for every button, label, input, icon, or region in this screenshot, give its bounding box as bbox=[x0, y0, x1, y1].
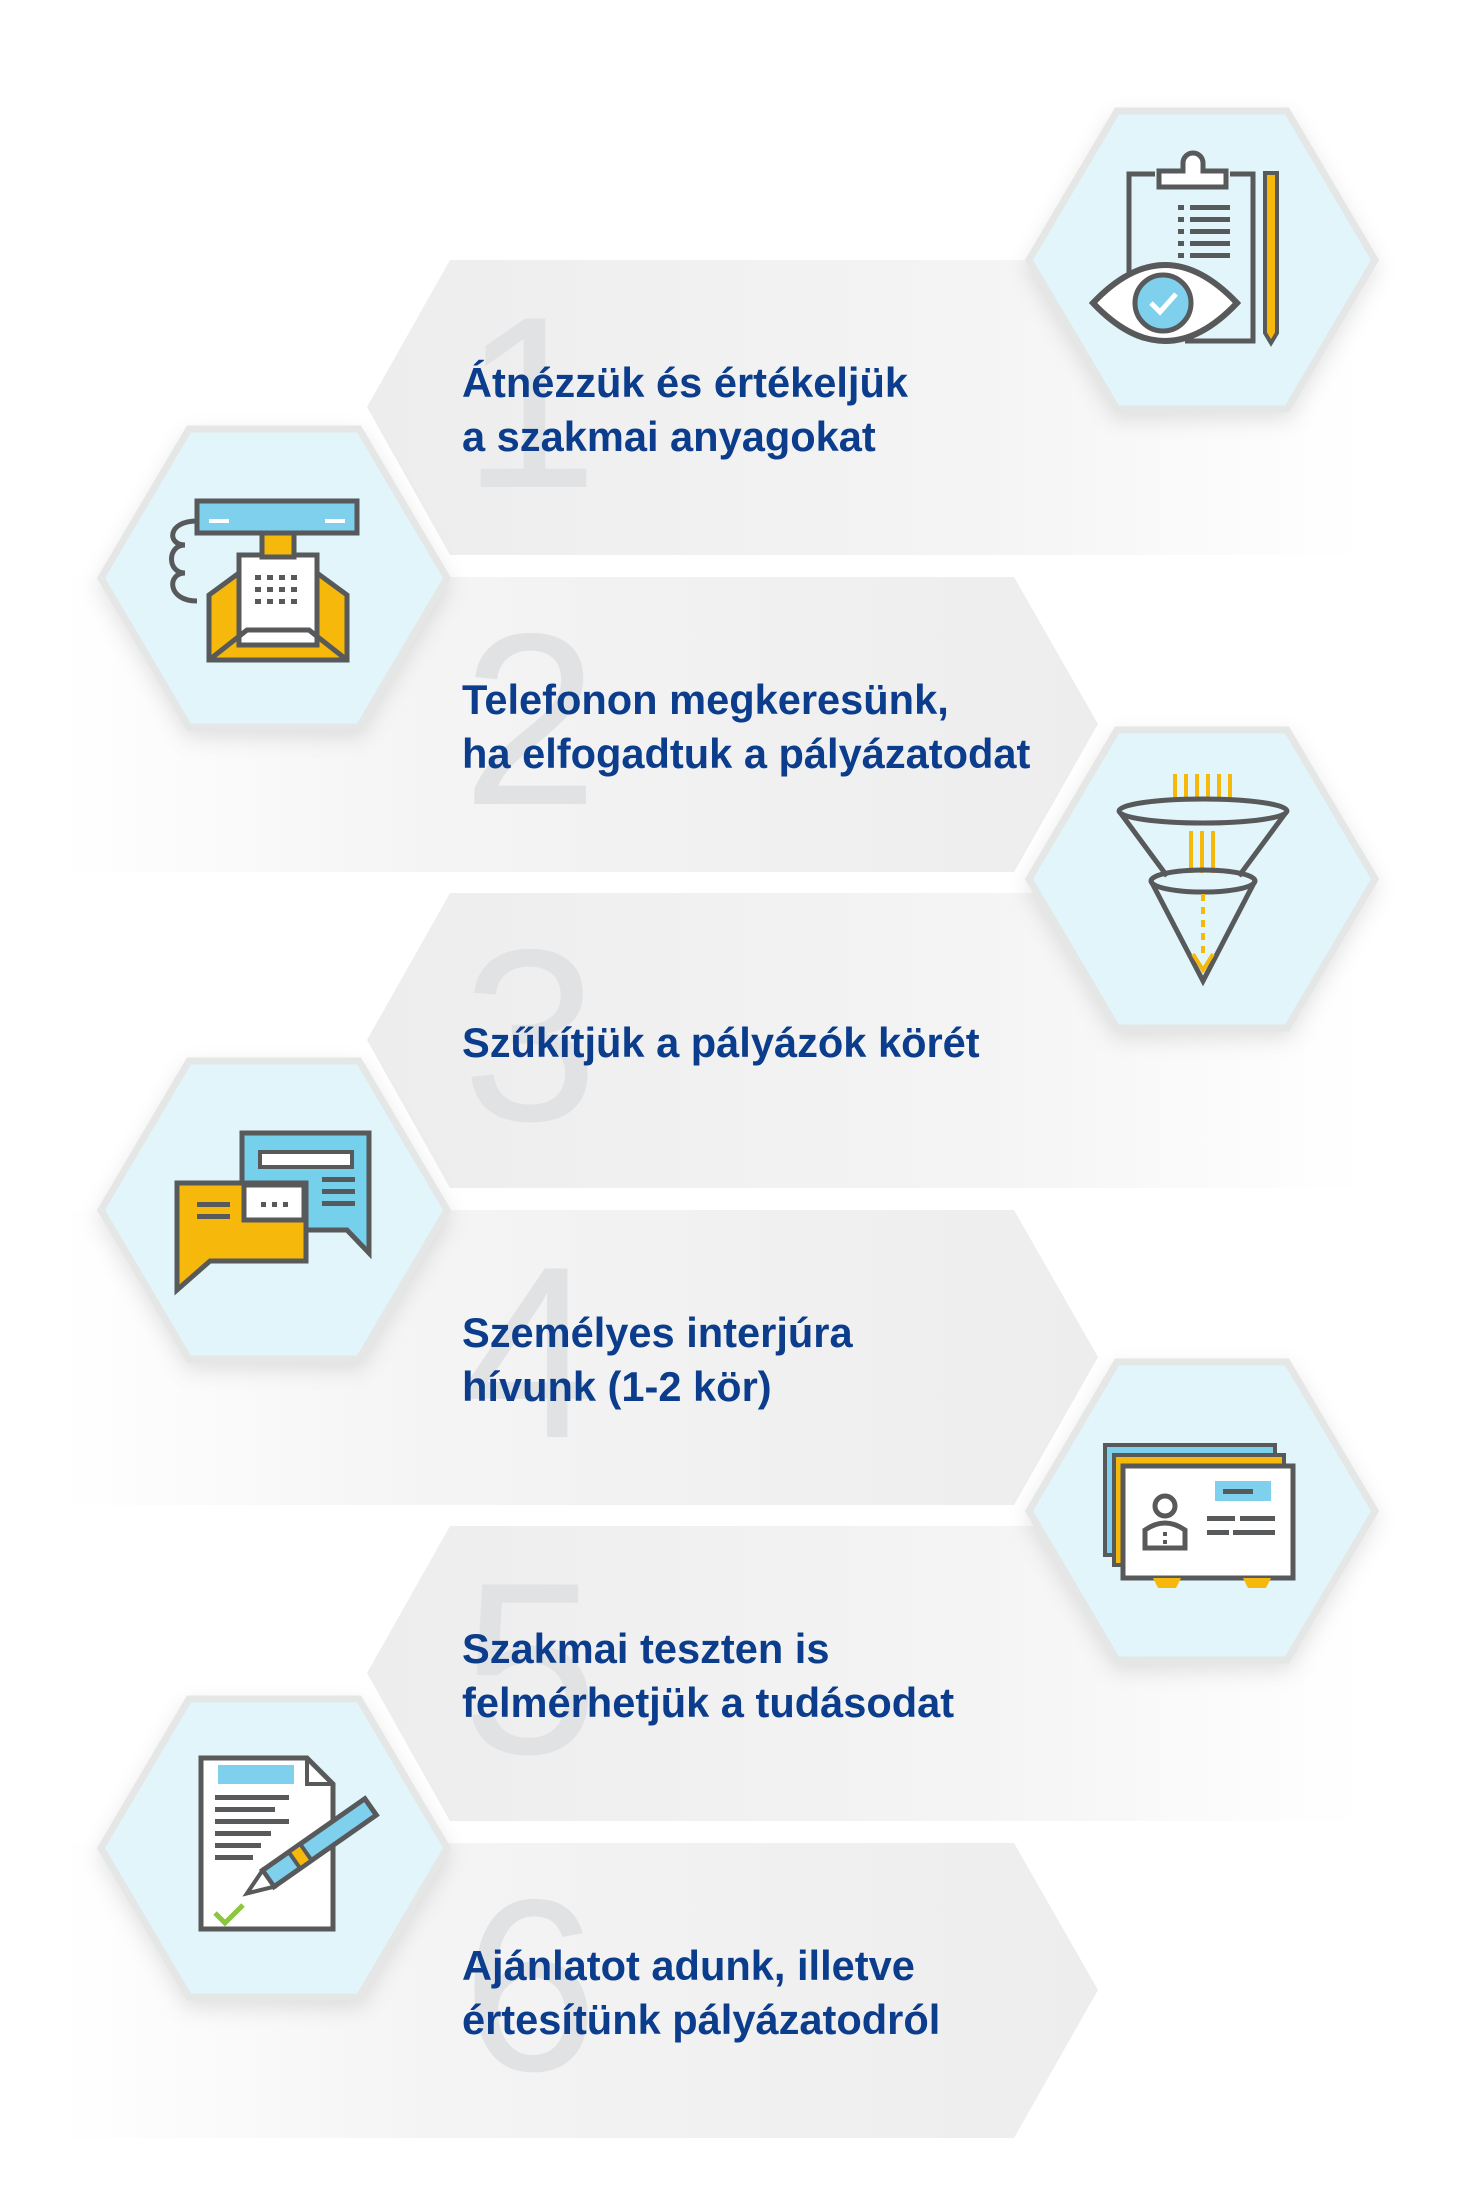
number 3: 3 bbox=[462, 898, 598, 1172]
text 1: a szakmai anyagokat bbox=[462, 413, 876, 460]
text 3: Szűkítjük a pályázók körét bbox=[462, 1019, 980, 1066]
text 2 bbox=[462, 676, 1030, 777]
hex icon 6: document and pen bbox=[97, 1696, 451, 2013]
text 4: Személyes interjúra bbox=[462, 1309, 853, 1356]
text 4: hívunk (1-2 kör) bbox=[462, 1363, 772, 1410]
number 4: 4 bbox=[462, 1215, 598, 1489]
text 1: Átnézzük és értékeljük bbox=[462, 359, 908, 406]
text 6: Ajánlatot adunk, illetve bbox=[462, 1942, 915, 1989]
text 2: ha elfogadtuk a pályázatodat bbox=[462, 730, 1030, 777]
text 1 bbox=[462, 359, 908, 460]
hex icon 5: ID cards bbox=[1025, 1358, 1379, 1676]
text 2: Telefonon megkeresünk, bbox=[462, 676, 949, 723]
text 4 bbox=[462, 1309, 853, 1410]
band 5 bbox=[367, 1526, 1080, 1821]
hex icon 3: funnel bbox=[1025, 726, 1379, 1044]
hex icon 1: clipboard eye bbox=[1025, 108, 1379, 425]
band 6 bbox=[336, 1843, 1098, 2138]
number 6: 6 bbox=[462, 1848, 598, 2122]
number 5: 5 bbox=[462, 1531, 598, 1805]
number 2: 2 bbox=[462, 582, 598, 856]
text 5: felmérhetjük a tudásodat bbox=[462, 1679, 954, 1726]
band 4 bbox=[336, 1210, 1098, 1505]
text 5 bbox=[462, 1625, 954, 1726]
band 1 bbox=[367, 260, 1080, 555]
text 6: értesítünk pályázatodról bbox=[462, 1996, 940, 2043]
text 5: Szakmai teszten is bbox=[462, 1625, 829, 1672]
hex icon 4: chat bubbles bbox=[97, 1058, 451, 1375]
band 2 bbox=[336, 577, 1098, 872]
hex icon 2: telephone bbox=[97, 426, 451, 743]
band 3 bbox=[367, 893, 1080, 1188]
number 1: 1 bbox=[462, 265, 598, 539]
text 6 bbox=[462, 1942, 940, 2043]
